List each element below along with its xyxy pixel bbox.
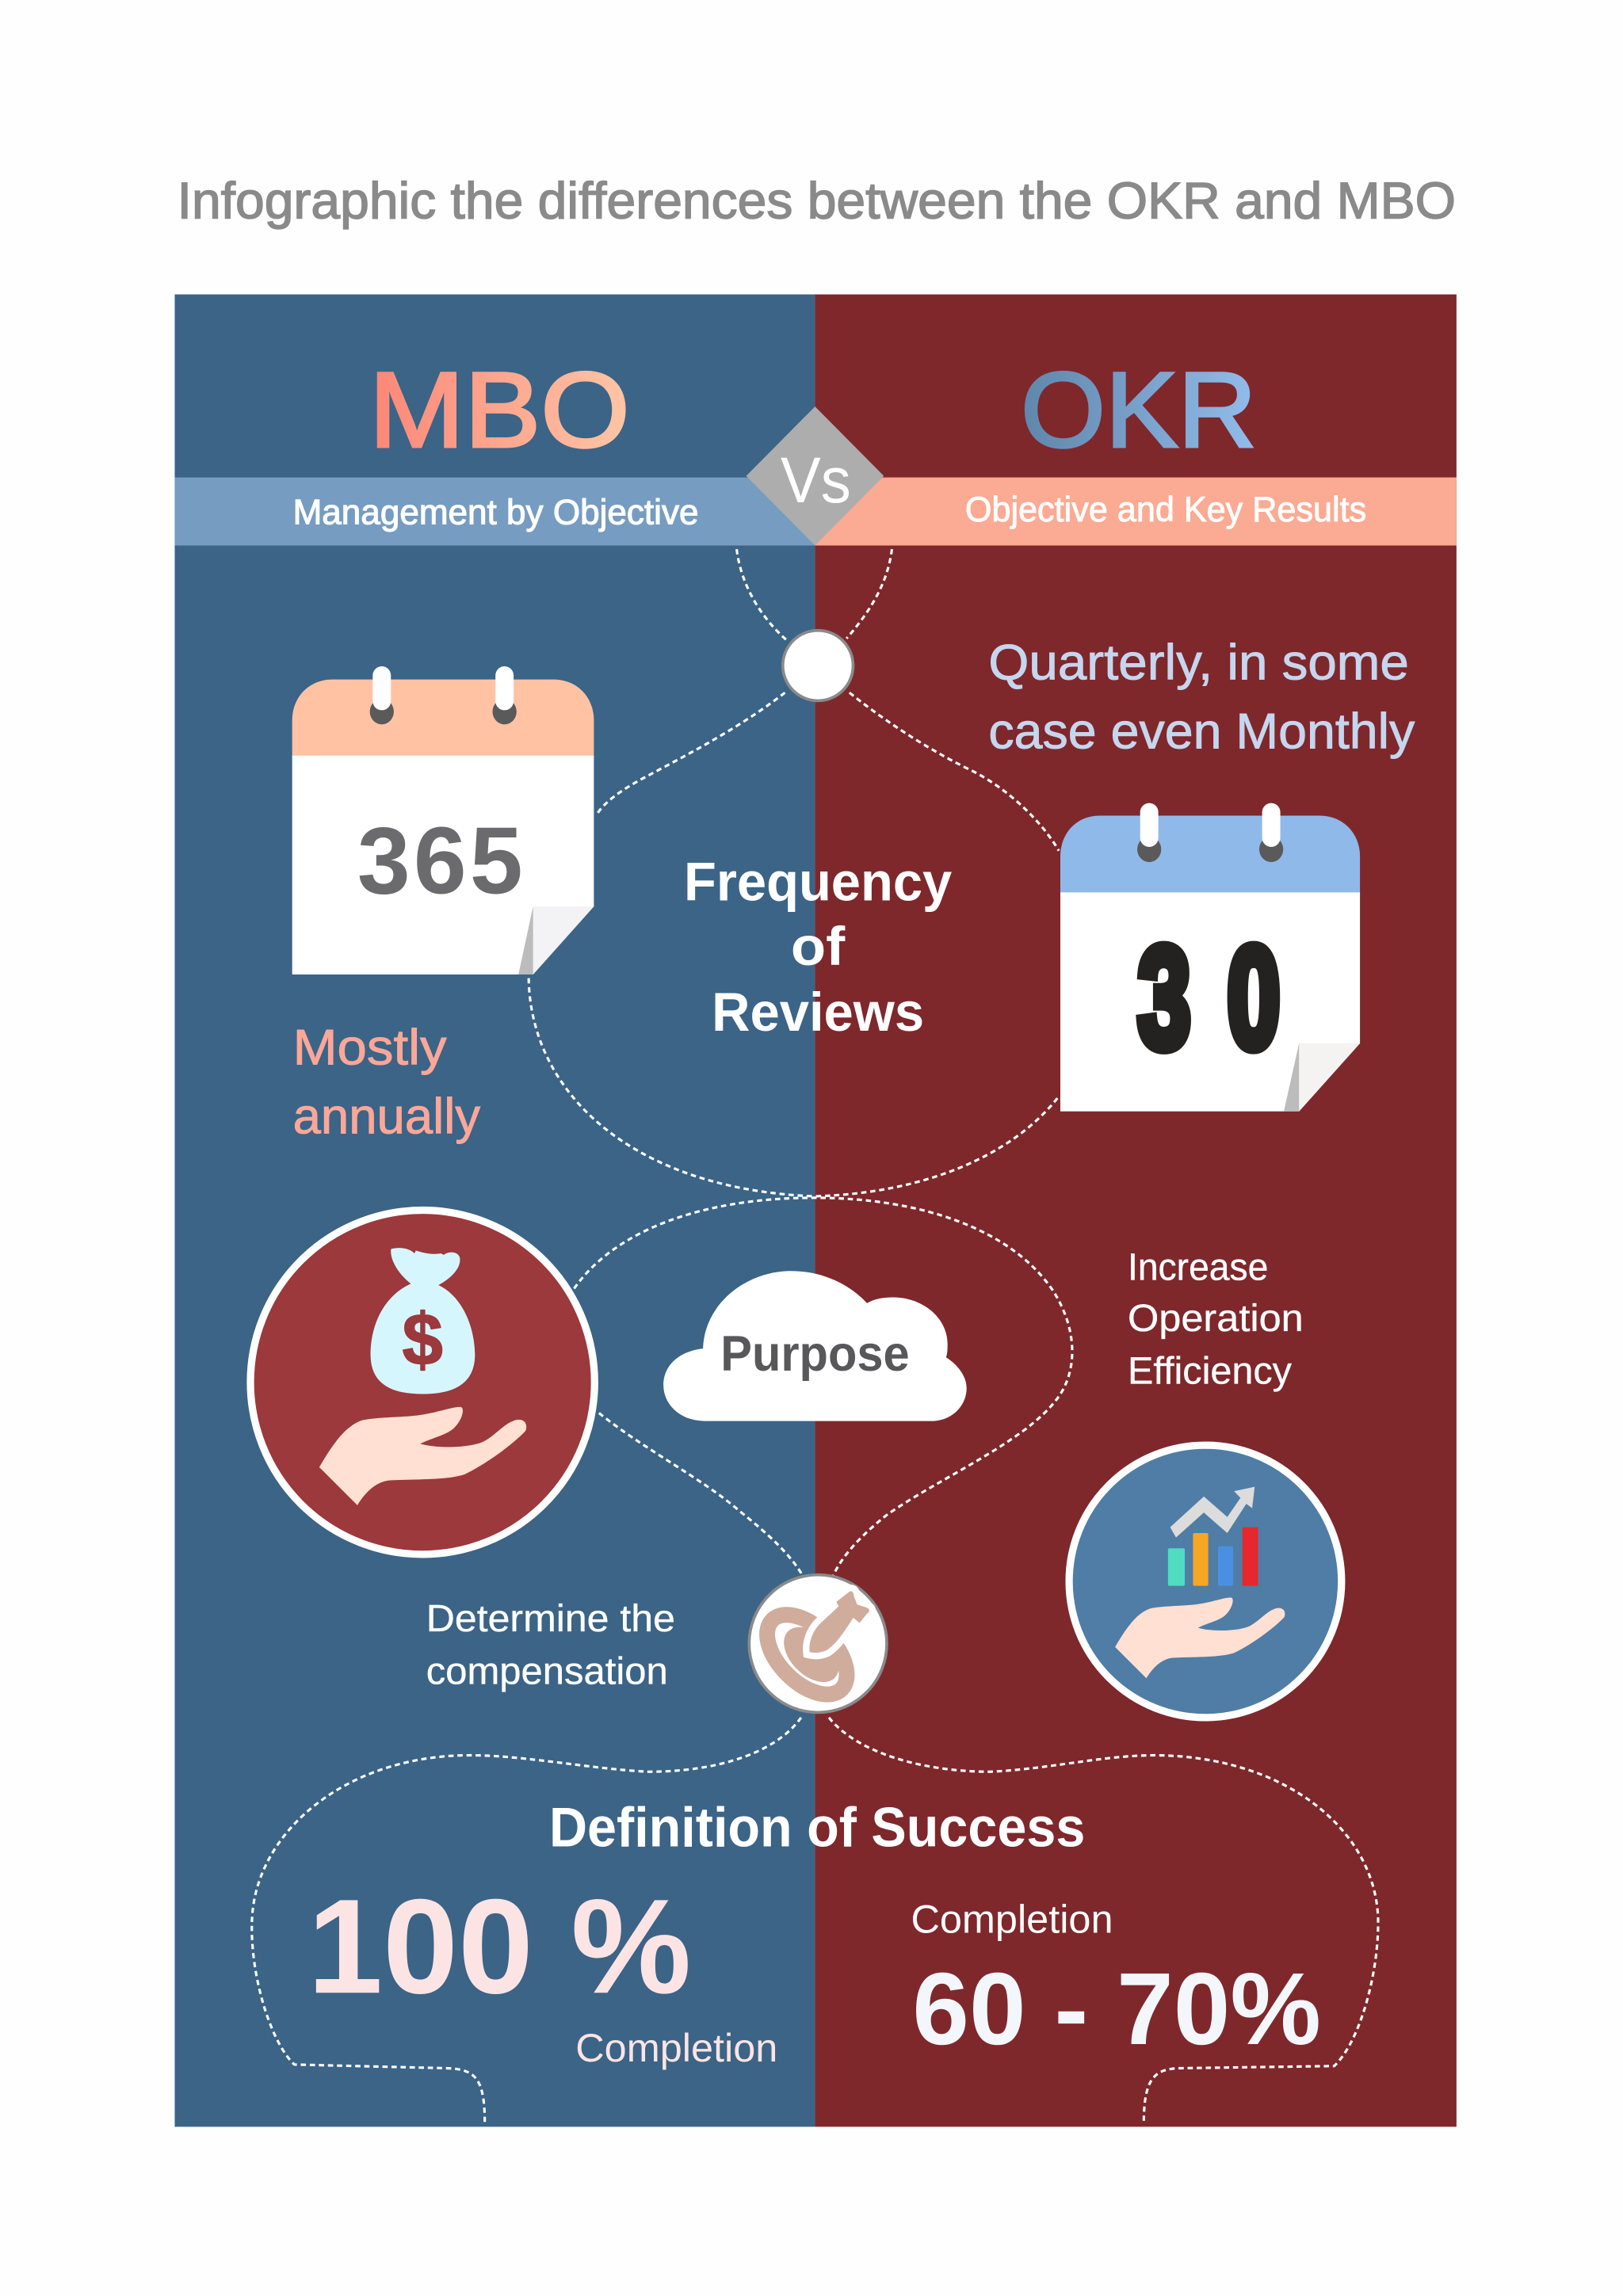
panel: OKR side background <box>815 295 1457 2126</box>
text: Increase Operation Efficiency: Efficiency <box>1128 1351 1292 1393</box>
heading: Frequency of Reviews <box>684 852 952 1043</box>
icon: calendar 30: 30 <box>1138 917 1317 1077</box>
text: Mostly annually: Mostly <box>293 1020 447 1076</box>
badge: Vs diamond: Vs <box>781 444 851 517</box>
heading: Definition of Success: Definition of Success <box>549 1796 1085 1859</box>
icon: growth chart in hand circle <box>1069 1445 1342 1718</box>
connector: dashed lines of purpose section <box>574 1198 1072 1576</box>
text: Quarterly, in some case even Monthly: case even Monthly <box>988 704 1415 759</box>
icon: target with dart <box>749 1575 887 1712</box>
label: Completion (OKR): Completion <box>911 1897 1113 1942</box>
node: top circle <box>783 631 853 700</box>
label: Completion (MBO): Completion <box>575 2026 777 2070</box>
subtitle: Management by Objective: Management by Objective <box>293 494 699 532</box>
text: Increase Operation Efficiency <box>1128 1246 1304 1393</box>
icon: money bag in hand circle <box>250 1211 594 1554</box>
text: Increase Operation Efficiency: Operation <box>1128 1298 1304 1340</box>
heading: Frequency of Reviews: Frequency <box>684 852 952 913</box>
connector: dashed outlines of success section <box>252 1718 1378 2123</box>
text: Determine the compensation <box>426 1598 675 1692</box>
band: MBO subtitle ribbon <box>174 478 815 546</box>
band: OKR subtitle ribbon <box>815 478 1457 546</box>
icon: calendar 30 <box>1060 803 1360 1112</box>
icon: money bag in hand circle: $ <box>402 1299 443 1381</box>
heading: OKR: OKR <box>1021 350 1257 470</box>
text: Quarterly, in some case even Monthly: Quarterly, in some <box>988 635 1409 691</box>
stat: 100 %: 100 % <box>307 1871 691 2022</box>
icon: cloud with Purpose label: Purpose <box>720 1326 910 1382</box>
text: Quarterly, in some case even Monthly <box>988 635 1415 759</box>
title: Infographic the differences between the OKR and MBO <box>178 171 1456 229</box>
text: Determine the compensation: Determine the <box>426 1598 675 1640</box>
icon: calendar 365 <box>292 666 594 974</box>
text: Increase Operation Efficiency: Increase <box>1128 1246 1268 1288</box>
badge: Vs diamond <box>747 406 884 546</box>
panel: MBO side background <box>174 295 815 2126</box>
text: Determine the compensation: compensation <box>426 1650 668 1692</box>
text: Mostly annually: annually <box>293 1089 481 1145</box>
heading: Frequency of Reviews: Reviews <box>712 982 924 1043</box>
stat: 60 - 70%: 60 - 70% <box>912 1952 1321 2066</box>
connector: dashed lines of frequency section <box>529 549 1059 1196</box>
text: Mostly annually <box>293 1020 481 1145</box>
icon: cloud with Purpose label <box>663 1271 967 1421</box>
heading: MBO: MBO <box>369 350 630 470</box>
icon: calendar 365: 365 <box>357 807 523 913</box>
heading: Frequency of Reviews: of <box>791 917 846 977</box>
subtitle: Objective and Key Results: Objective and Key Results <box>965 490 1366 529</box>
